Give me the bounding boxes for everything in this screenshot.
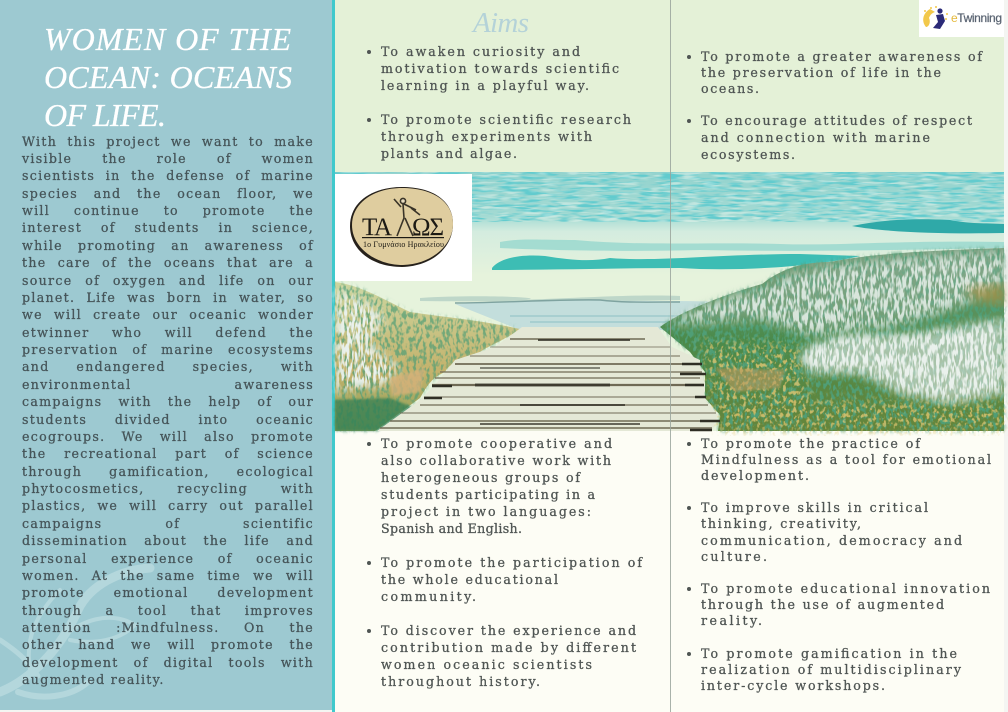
right dune vegetation (660, 248, 1004, 431)
logo: Talos school: 1ο Γυμνάσιο Ηρακλείου (363, 240, 444, 249)
aim: gamification: To promote gamification in the (701, 646, 957, 661)
project description paragraph: personal experience of oceanic (22, 550, 314, 566)
project description paragraph: through a tool that improves (22, 603, 314, 618)
aim: curiosity (367, 44, 619, 93)
project description paragraph: preservation of marine ecosystems (22, 342, 314, 357)
title: WOMEN OF THE (44, 21, 291, 57)
logo: eTwinning (919, 0, 1004, 37)
aim: cooperative work: Spanish and English. (381, 521, 522, 536)
panel: top aims background (335, 0, 1004, 173)
left dune vegetation (335, 282, 520, 431)
project description paragraph: phytocosmetics, recycling with (22, 481, 314, 496)
logo: Talos school (335, 174, 472, 281)
aim: respect: ecosystems. (701, 147, 795, 162)
project description paragraph (22, 134, 314, 687)
aim: women scientists (367, 623, 636, 689)
project description paragraph: plastics, we will carry out parallel (22, 498, 314, 513)
aims list: bottom left (367, 436, 643, 689)
project description paragraph: promote emotional development (22, 585, 314, 600)
aim: gamification (687, 646, 962, 693)
project description paragraph: campaigns with the help of our (22, 394, 314, 409)
wooden boardwalk (377, 327, 720, 431)
aim: augmented reality (687, 581, 990, 628)
aim: women scientists: contribution made by different (381, 640, 636, 655)
aim: mindfulness: Mindfulness as a tool for emotional (701, 452, 991, 467)
aim: community: To promote the participation of (381, 555, 643, 570)
aim: critical skills: culture. (701, 549, 767, 564)
project description paragraph: environmental awareness (22, 377, 314, 392)
aim: community: the whole educational (381, 572, 558, 587)
aim: women scientists: women oceanic scientists (381, 657, 592, 672)
aim: mindfulness: development. (701, 468, 809, 483)
aim: gamification: realization of multidisciplinary (701, 662, 962, 677)
figure on logo (394, 198, 420, 236)
project description paragraph: augmented reality. (22, 672, 165, 687)
aim: cooperative work: project in two languages: (381, 504, 591, 519)
aim: critical skills: communication, democracy and (701, 533, 962, 548)
project description paragraph: women. At the same time we will (22, 568, 314, 583)
column divider (670, 0, 671, 712)
aim: research: through experiments with (381, 129, 592, 144)
aim: women scientists: To discover the experience and (381, 623, 636, 638)
aim: research: To promote scientific research (381, 112, 631, 127)
project description paragraph: students divided into oceanic (22, 412, 314, 426)
project description paragraph: planet. Life was born in water, so (22, 290, 314, 305)
aim: community (367, 555, 643, 604)
aim: preservation: To promote a greater awareness of (701, 49, 983, 64)
project description paragraph: other hand we will promote the (22, 637, 314, 652)
aim: augmented reality: reality. (701, 613, 762, 628)
photo: beach boardwalk and dunes (335, 172, 1004, 431)
aim: preservation: the preservation of life in the (701, 65, 941, 80)
aim: cooperative work: students participating in a (381, 487, 595, 502)
aim: respect: To encourage attitudes of respect (701, 113, 972, 128)
project description paragraph: With this project we want to make (22, 134, 314, 148)
project description paragraph: source of oxygen and life on our (22, 272, 314, 288)
aim: curiosity: learning in a playful way. (381, 78, 589, 93)
project description paragraph: dissemination about the life and (22, 533, 314, 548)
aim: cooperative work (367, 436, 612, 536)
logo: Talos school: ΤΑ (362, 214, 392, 241)
aim: critical skills (687, 500, 962, 564)
title: OF LIFE. (44, 97, 166, 133)
project description paragraph: visible the role of women (22, 151, 314, 166)
aim: gamification: inter-cycle workshops. (701, 678, 885, 693)
aim: mindfulness: To promote the practice of (701, 436, 921, 451)
project description paragraph: through gamification, ecological (22, 464, 314, 479)
project description paragraph: the recreational part of science (22, 446, 314, 461)
aim: respect (687, 113, 972, 162)
aim: cooperative work: heterogeneous groups of (381, 470, 581, 485)
aim: critical skills: thinking, creativity, (701, 516, 861, 531)
aim: augmented reality: through the use of augmented (701, 597, 944, 612)
aim: respect: and connection with marine (701, 130, 930, 145)
project description paragraph: campaigns of scientific (22, 516, 314, 531)
aims list: top right (687, 49, 983, 162)
project description paragraph: species and the ocean floor, we (22, 186, 314, 201)
aims list: bottom right (687, 436, 991, 693)
project description paragraph: interest of students in science, (22, 220, 314, 235)
title: OCEAN: OCEANS (44, 59, 292, 95)
project description paragraph: we will create our oceanic wonder (22, 307, 314, 322)
project description paragraph: attention :Mindfulness. On the (22, 620, 314, 635)
aim: cooperative work: To promote cooperative and (381, 436, 612, 451)
decorative leaf motif (0, 568, 150, 697)
project description paragraph: scientists in the defense of marine (22, 168, 314, 183)
aim: community: community. (381, 589, 476, 604)
aim: research: plants and algae. (381, 146, 517, 161)
aim: women scientists: throughout history. (381, 674, 540, 689)
project description paragraph: will continue to promote the (22, 203, 314, 218)
aims list: top left (367, 44, 631, 161)
project description paragraph: the care of the oceans that are a (22, 255, 314, 270)
aim: augmented reality: To promote educational innovation (701, 581, 990, 596)
aim: curiosity: motivation towards scientific (381, 61, 619, 76)
aim: preservation: oceans. (701, 81, 759, 96)
aim: preservation (687, 49, 983, 96)
logo: Talos school: ΩΣ (412, 214, 444, 241)
aim: mindfulness (687, 436, 991, 483)
project description paragraph: etwinner who will defend the (22, 325, 314, 340)
logo: eTwinning: eTwinning (951, 11, 1002, 25)
aim: curiosity: To awaken curiosity and (381, 44, 580, 59)
heading: Aims: Aims (471, 7, 529, 39)
project description paragraph: while promoting an awareness of (22, 238, 314, 253)
aim: critical skills: To improve skills in critical (701, 500, 928, 515)
aim: cooperative work: also collaborative work with (381, 453, 611, 468)
panel: bottom aims background (335, 431, 1004, 712)
project description paragraph: ecogroups. We will also promote (22, 429, 314, 444)
project description paragraph: development of digital tools with (22, 655, 314, 670)
title (44, 21, 292, 133)
project description paragraph: and endangered species, with (22, 359, 314, 374)
aim: research (367, 112, 631, 161)
panel: left teal sidebar (0, 0, 335, 712)
